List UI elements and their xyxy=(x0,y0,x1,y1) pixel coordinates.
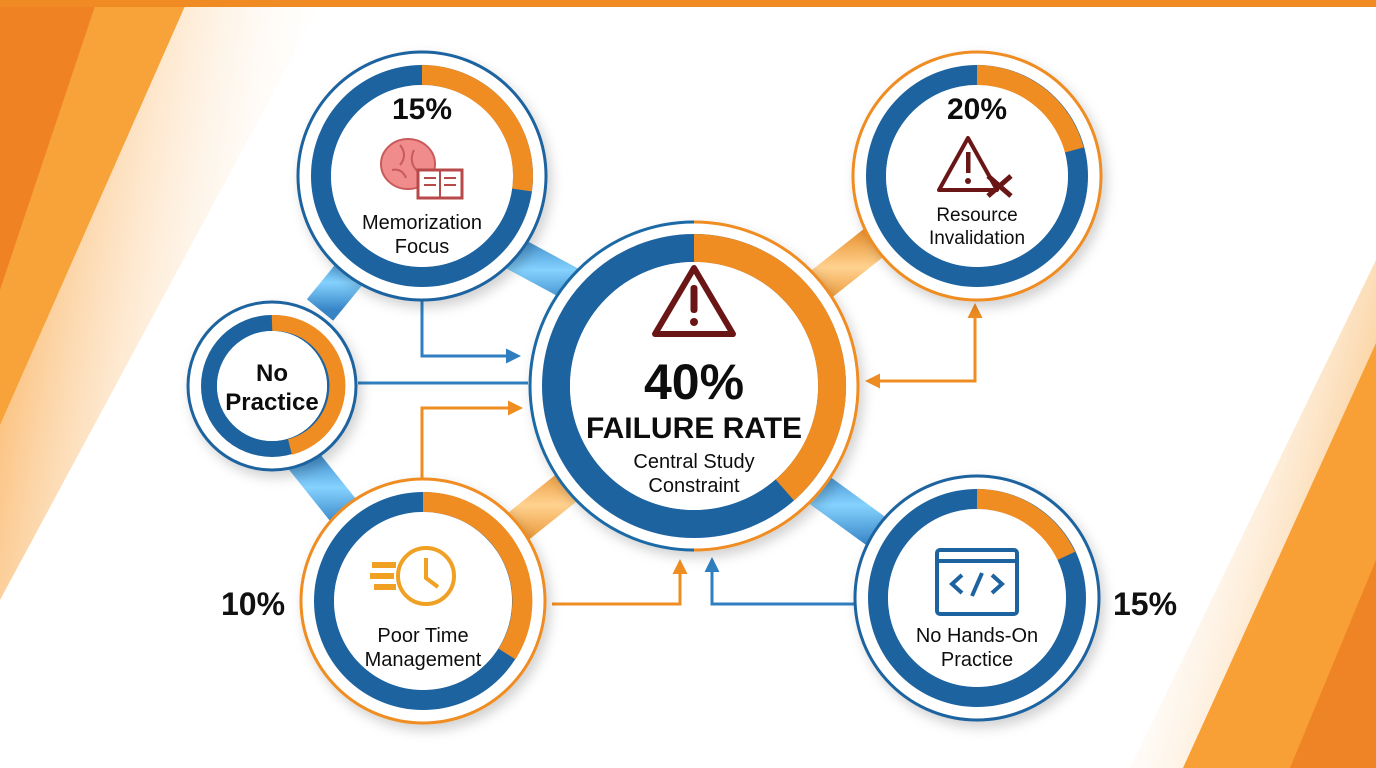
panel: No Hands-On Practice: No Hands-On xyxy=(916,625,1038,647)
panel: No Hands-On Practice: Practice xyxy=(941,649,1013,671)
text: central: 40% xyxy=(644,354,744,410)
panel: Resource Invalidation xyxy=(853,52,1101,300)
central circle xyxy=(530,222,858,550)
text: central: Central Study xyxy=(633,451,755,473)
label: 10%: 10% xyxy=(221,586,285,622)
connector bars xyxy=(295,230,895,545)
panel: Resource Invalidation: Resource xyxy=(936,205,1018,226)
panel: Poor Time Management xyxy=(301,479,545,723)
text: central: FAILURE RATE xyxy=(586,412,802,445)
icon: warning with x xyxy=(939,138,1011,196)
panel: Resource Invalidation: Invalidation xyxy=(929,228,1025,249)
panel: No Hands-On Practice xyxy=(855,476,1099,720)
icon: code window xyxy=(937,550,1017,614)
icon: brain and book xyxy=(381,139,462,198)
panel: Memorization Focus: 15% xyxy=(392,93,452,126)
arrows xyxy=(358,300,975,604)
panel: Poor Time Management: Poor Time xyxy=(377,625,469,647)
icon: clock xyxy=(370,548,454,604)
text: central: Constraint xyxy=(648,475,740,497)
icon: warning xyxy=(655,268,733,334)
panel: Memorization Focus: Memorization xyxy=(362,212,482,234)
label: 15%: 15% xyxy=(1113,586,1177,622)
panel: Resource Invalidation: 20% xyxy=(947,93,1007,126)
panel: No Practice xyxy=(188,302,356,470)
panel: No Practice: Practice xyxy=(225,389,319,416)
panel: Memorization Focus xyxy=(298,52,546,300)
panel: Memorization Focus: Focus xyxy=(395,236,449,258)
panel: Poor Time Management: Management xyxy=(365,649,482,671)
panel: No Practice: No xyxy=(256,360,288,387)
text: central xyxy=(586,354,802,497)
